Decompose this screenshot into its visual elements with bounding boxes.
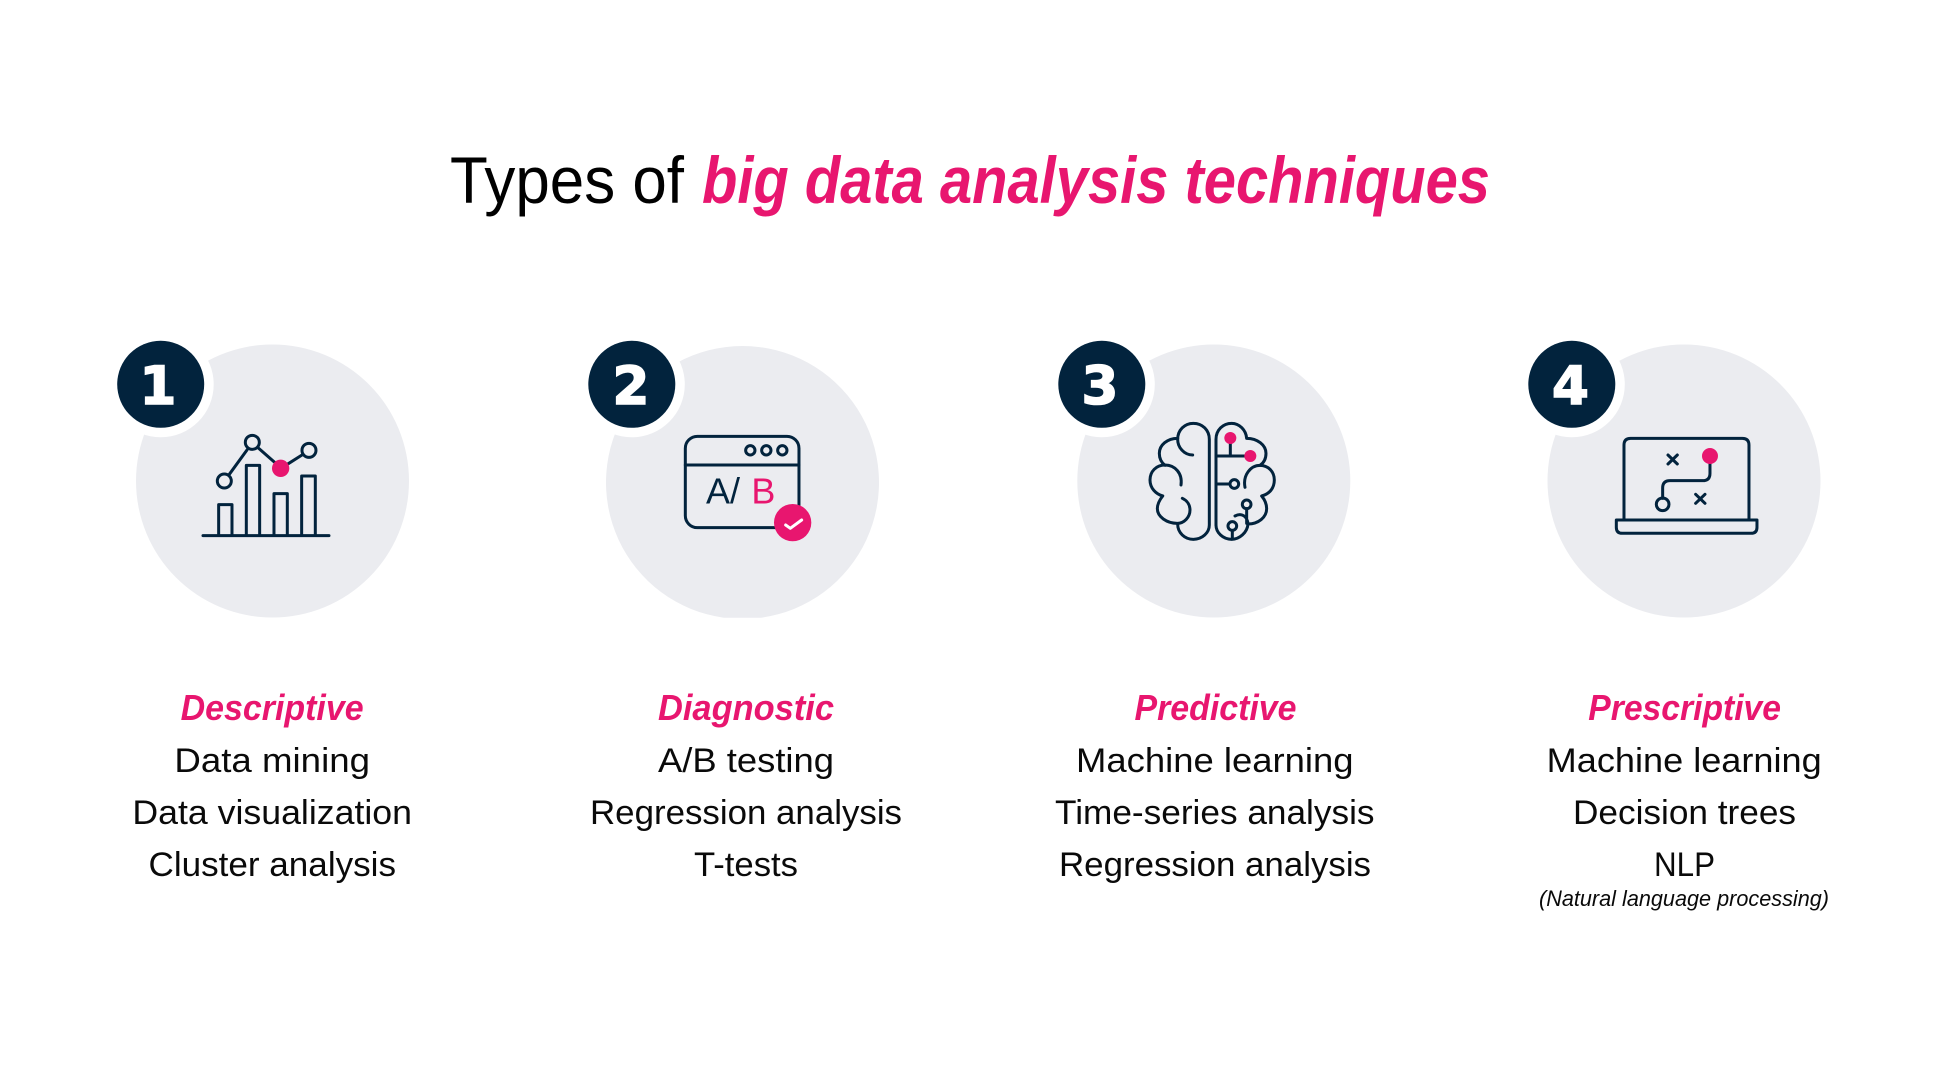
icon circle 1 xyxy=(136,344,409,618)
diagnostic techniques: Regression analysis xyxy=(590,794,902,832)
descriptive techniques: Data visualization xyxy=(132,794,412,832)
number badge 2 xyxy=(579,331,685,437)
descriptive heading: Descriptive xyxy=(181,687,364,728)
prescriptive techniques: Decision trees xyxy=(1573,794,1796,832)
descriptive techniques xyxy=(132,742,412,884)
number badge 3 xyxy=(1049,331,1155,437)
diagnostic techniques: T-tests xyxy=(694,846,798,884)
icon circle 2 xyxy=(606,346,879,618)
panel: prescriptive xyxy=(1519,331,1829,911)
title: big data analysis techniques xyxy=(702,143,1490,217)
predictive techniques xyxy=(1055,742,1374,884)
diagnostic techniques: A/B testing xyxy=(658,742,834,780)
predictive techniques: Regression analysis xyxy=(1059,846,1371,884)
number badge 3: 3 xyxy=(1082,356,1118,417)
predictive techniques: Time-series analysis xyxy=(1055,794,1374,832)
prescriptive techniques: (Natural language processing) xyxy=(1539,886,1829,911)
number badge 2: 2 xyxy=(613,356,649,417)
number badge 1 xyxy=(108,331,214,437)
prescriptive techniques: NLP xyxy=(1654,846,1715,884)
title: Types of xyxy=(450,143,685,217)
diagnostic techniques xyxy=(590,742,902,884)
number badge 1: 1 xyxy=(140,356,176,417)
prescriptive techniques: Machine learning xyxy=(1547,742,1822,780)
icon: A/B test window: A/ xyxy=(706,470,740,511)
panel: predictive xyxy=(1049,331,1374,884)
number badge 4: 4 xyxy=(1552,356,1589,417)
predictive heading: Predictive xyxy=(1134,687,1296,728)
prescriptive techniques xyxy=(1539,742,1829,911)
icon circle 4 xyxy=(1548,344,1820,618)
icon circle 3 xyxy=(1077,344,1350,618)
prescriptive heading: Prescriptive xyxy=(1588,687,1781,728)
icon: laptop with decision path xyxy=(1616,438,1757,533)
icon: brain circuit xyxy=(1150,423,1274,539)
icon: A/B test window: B xyxy=(751,470,775,511)
panel: diagnostic xyxy=(579,331,902,884)
icon: bar and line chart xyxy=(203,435,329,536)
diagnostic heading: Diagnostic xyxy=(658,687,834,728)
descriptive techniques: Cluster analysis xyxy=(148,846,396,884)
descriptive techniques: Data mining xyxy=(174,742,370,780)
predictive techniques: Machine learning xyxy=(1076,742,1354,780)
icon: A/B test window xyxy=(685,436,811,541)
panel: descriptive xyxy=(108,331,412,884)
title xyxy=(450,143,1490,217)
number badge 4 xyxy=(1519,331,1625,437)
